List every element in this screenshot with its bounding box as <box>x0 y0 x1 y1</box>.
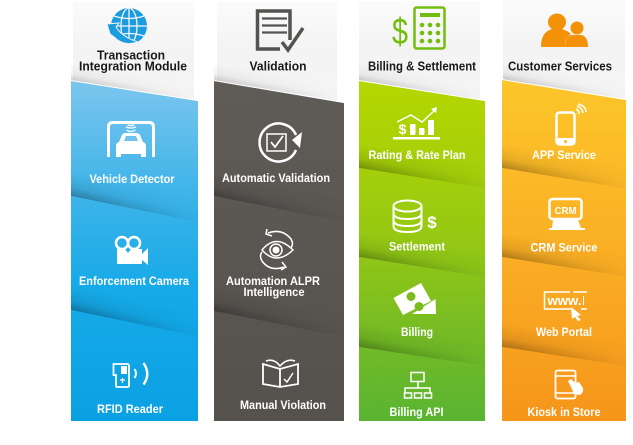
icon: web portal <box>544 292 587 321</box>
column body <box>71 81 198 421</box>
header background <box>217 2 337 102</box>
label: Web Portal <box>536 325 592 339</box>
icon: vehicle detector <box>108 122 154 157</box>
label: Settlement <box>389 240 445 254</box>
label: Manual Violation <box>240 398 326 412</box>
label: Rating & Rate Plan <box>368 148 466 162</box>
icon: web portal: www. <box>546 294 582 308</box>
icon: rating and rate plan: $ <box>399 121 407 137</box>
column body <box>502 80 626 421</box>
heading <box>79 48 187 74</box>
header background <box>503 0 625 100</box>
panel: Validation <box>214 2 344 421</box>
icon: enforcement camera <box>116 237 148 265</box>
panel: Customer Services <box>502 0 626 421</box>
icon: app phone <box>556 104 586 145</box>
icon: settlement database: $ <box>427 213 437 232</box>
label: Kiosk in Store <box>528 405 601 419</box>
column body <box>214 81 344 421</box>
icon: dollar and calculator: $ <box>392 11 408 52</box>
icon: CRM monitor: CRM <box>554 206 576 217</box>
label: Automatic Validation <box>222 171 330 185</box>
panel: Transaction Integration Module <box>71 2 198 421</box>
icon: people <box>541 14 588 47</box>
icon: CRM monitor <box>549 199 585 230</box>
label: Billing API <box>390 405 444 419</box>
icon: billing bank notes <box>394 283 436 315</box>
label: Automation ALPR <box>226 274 320 288</box>
label: Intelligence <box>244 285 305 299</box>
icon: dollar and calculator <box>392 8 444 52</box>
label: Vehicle Detector <box>90 172 175 186</box>
header background <box>73 2 194 102</box>
label: Enforcement Camera <box>79 274 189 288</box>
icon: globe with arrow <box>107 8 147 44</box>
header background <box>359 1 480 101</box>
icon: manual violation book <box>263 360 298 387</box>
icon: automatic validation <box>260 124 302 162</box>
icon: kiosk <box>556 370 583 398</box>
heading: Transaction <box>97 48 165 62</box>
label: CRM Service <box>530 240 598 254</box>
icon: document with check <box>258 11 303 50</box>
label: RFID Reader <box>97 402 163 416</box>
icon: ALPR eye <box>260 229 293 270</box>
heading: Customer Services <box>508 60 612 74</box>
label: Billing <box>401 325 433 339</box>
column body <box>359 81 485 421</box>
heading: Integration Module <box>79 60 187 74</box>
icon: settlement database <box>394 200 437 232</box>
heading: Billing & Settlement <box>368 60 477 74</box>
label: APP Service <box>532 148 596 162</box>
icon: billing API network <box>404 372 432 398</box>
panel: Billing & Settlement <box>359 1 485 421</box>
heading: Validation <box>250 60 306 74</box>
icon: RFID reader <box>114 363 147 387</box>
label <box>226 274 320 299</box>
icon: rating and rate plan <box>393 107 440 140</box>
